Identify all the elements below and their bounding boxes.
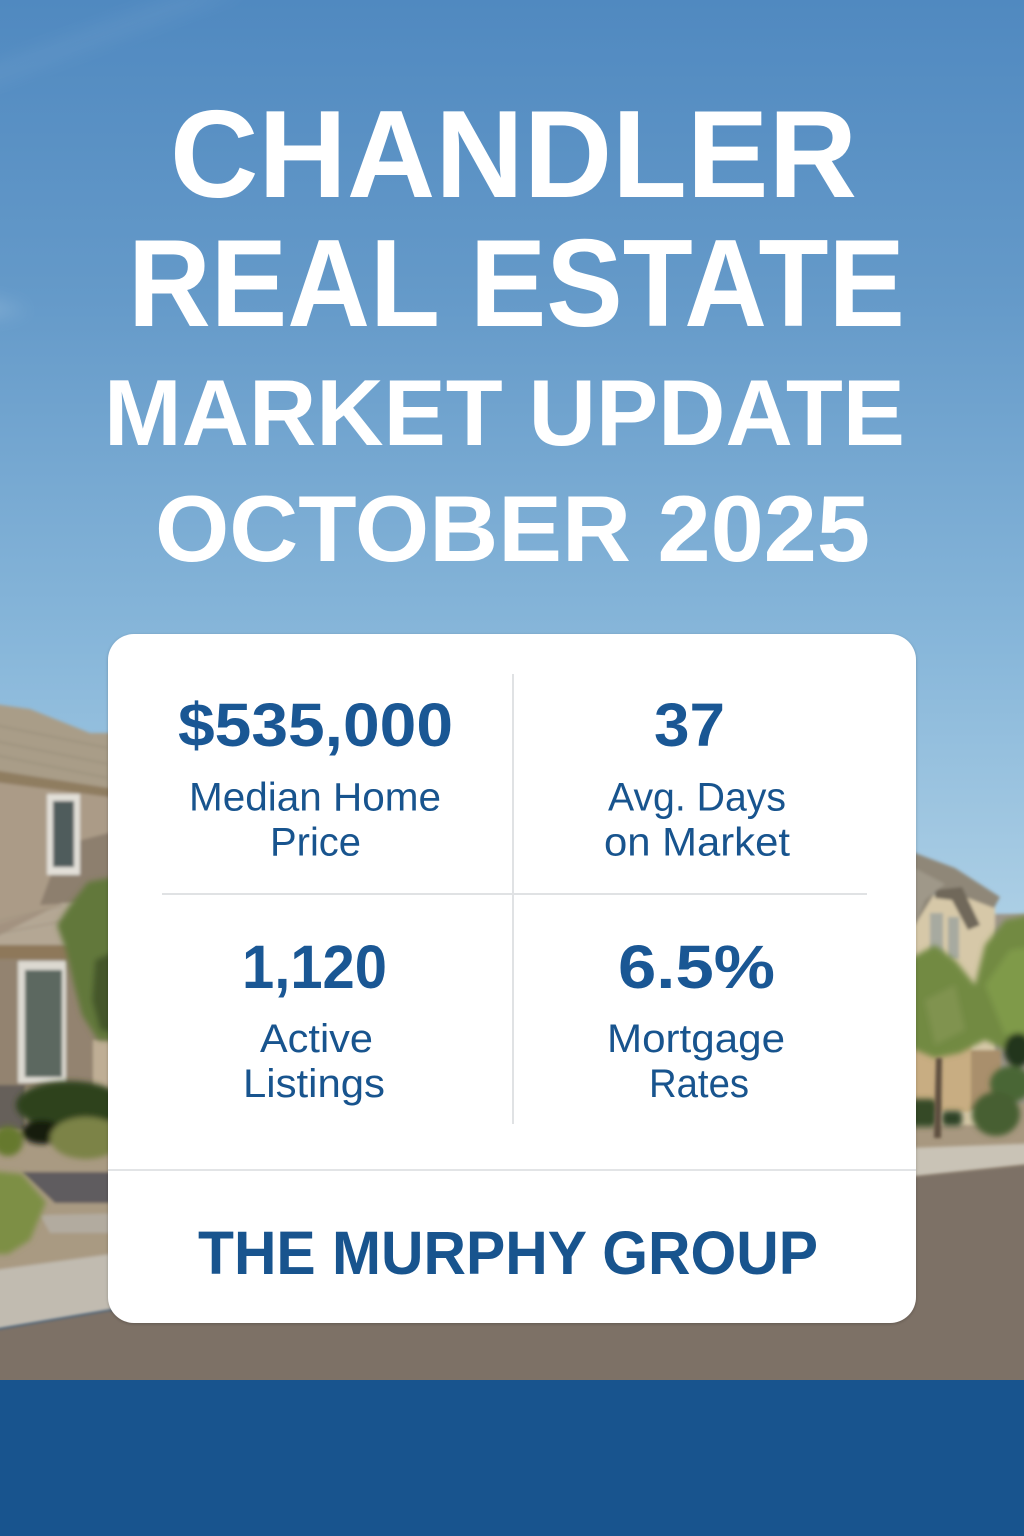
stat: active listings: 1,120 — [242, 933, 387, 1001]
title line: Market Update: MARKET UPDATE — [104, 360, 905, 465]
stat: median home price: Median Home — [189, 776, 441, 820]
stat: average days on market — [604, 691, 790, 864]
stat: median home price: $535,000 — [178, 691, 453, 759]
stat: active listings: Listings — [243, 1062, 385, 1106]
stat: mortgage rates: Rates — [649, 1062, 749, 1106]
title line: Chandler: CHANDLER — [170, 86, 857, 224]
bottom navy band — [0, 1380, 1024, 1536]
stat: average days on market: on Market — [604, 820, 790, 864]
title — [104, 86, 905, 581]
background: left house and landscaping — [0, 702, 140, 1332]
background: blue sky — [0, 0, 1024, 1000]
background: right house and landscaping — [880, 835, 1024, 1195]
stat: median home price: Price — [270, 820, 361, 864]
title line: Real Estate: REAL ESTATE — [128, 215, 905, 353]
footer: company name: THE MURPHY GROUP — [198, 1219, 818, 1287]
panel: market statistics card — [108, 634, 916, 1323]
stat: mortgage rates: Mortgage — [607, 1017, 785, 1061]
stat: average days on market: Avg. Days — [608, 776, 786, 820]
background: asphalt road — [0, 1163, 1024, 1390]
title line: October 2025: OCTOBER 2025 — [155, 476, 870, 581]
stat: active listings: Active — [260, 1017, 373, 1061]
right trees and shrubs — [880, 912, 1024, 1136]
left tree and shrubs — [0, 872, 140, 1254]
stat: average days on market: 37 — [654, 691, 725, 759]
stat: mortgage rates: 6.5% — [618, 933, 775, 1001]
stat: median home price — [178, 691, 453, 864]
stat: mortgage rates — [607, 933, 785, 1106]
stat: active listings — [242, 933, 387, 1106]
